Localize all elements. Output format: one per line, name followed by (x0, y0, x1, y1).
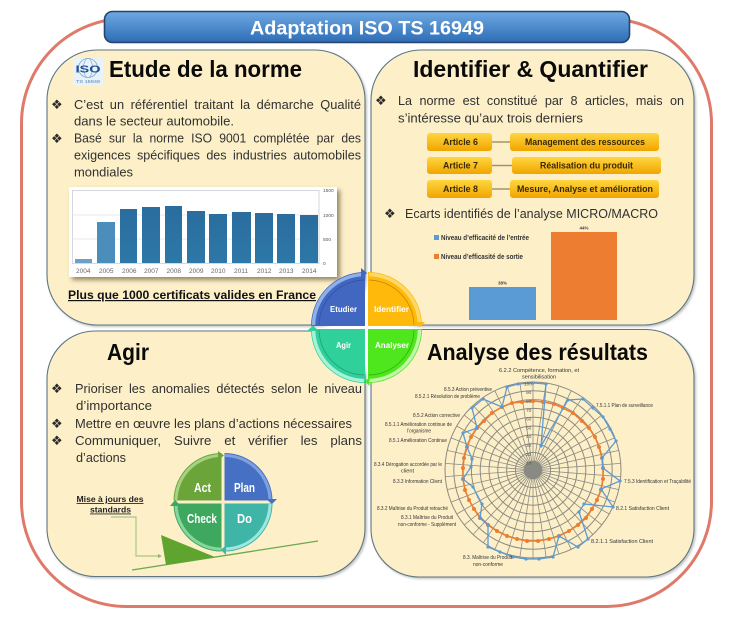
radar chart (374, 368, 691, 568)
text block: description de la norme (51, 97, 361, 180)
text block: description de la norme: exigences spécifiques des industries automobiles (74, 148, 361, 162)
callout: mise à jour des standards (76, 494, 162, 558)
axis labels: non-conforme (473, 562, 503, 568)
bar chart: certificats par année: 1500 (323, 188, 334, 194)
bar chart: certificats par année: 1000 (323, 213, 334, 219)
text block: actions: Mettre en œuvre les plans d’actions nécessaires (75, 416, 352, 431)
text block: écarts identifiés: ❖ (384, 207, 396, 222)
bar chart: efficacité entrée et sortie: Niveau d’efficasité de sortie (441, 254, 523, 261)
text block: description de la norme: ❖ (51, 98, 63, 113)
panel: Analyse des résultats (371, 330, 694, 577)
diagram: articles 6 7 8: Réalisation du produit (540, 160, 633, 170)
series: sortie (orange) (463, 401, 603, 541)
panel: Agir (47, 331, 365, 576)
bar chart: certificats par année: 2013 (279, 268, 294, 275)
axis labels: 8.3.3 Information Client (393, 479, 443, 485)
axis labels: 7.5.3 Identification et Traçabilité (624, 479, 691, 485)
callout: mise à jour des standards: Mise à jours des (76, 494, 144, 504)
scale labels: 90 (526, 390, 532, 396)
title banner (104, 12, 630, 42)
heading: Identifier et Quantifier: Identifier & Quantifier (413, 56, 648, 82)
text block: actions: ❖ (51, 434, 63, 449)
scale labels: 30 (526, 443, 532, 449)
heading: Etude de la norme: Etude de la norme (109, 56, 302, 82)
icon: ISO TS 16949 badge: ISO (76, 64, 100, 76)
axis labels: non-conforme - Supplément (398, 522, 456, 528)
axis labels: 7.5.1.1 Plan de surveillance (596, 403, 653, 409)
axis labels: 8.3.1 Maîtrise du Produit (401, 515, 454, 521)
diagram: articles 6 7 8: Article 7 (443, 160, 478, 170)
text block: articles de la norme (375, 93, 684, 126)
wedge and slope (132, 535, 318, 570)
icon: ISO TS 16949 badge (73, 57, 103, 86)
title banner: Adaptation ISO TS 16949 (250, 18, 484, 40)
icon: ISO TS 16949 badge: TS 16949 (76, 79, 101, 84)
text block: description de la norme: mondiales (74, 164, 133, 180)
central cycle wheel (307, 268, 425, 386)
panel: Identifier et Quantifier (371, 50, 694, 325)
axis labels (374, 368, 691, 568)
axis labels: 8.5.1.1 Amélioration continue de (385, 422, 452, 428)
bar chart: certificats par année: 2005 (99, 268, 114, 275)
diagram: articles 6 7 8: Mesure, Analyse et amélioration (517, 184, 653, 194)
scale labels: 50 (526, 426, 532, 432)
text block: actions: ❖ (51, 382, 63, 397)
axis labels: 8.5.3 Action préventive (444, 387, 492, 393)
bar chart: efficacité entrée et sortie: 44% (579, 226, 589, 230)
scale labels: 20 (526, 452, 532, 458)
axis labels: client (401, 468, 415, 474)
bar chart: certificats par année: 2006 (122, 268, 137, 275)
bar chart: certificats par année: 0 (323, 261, 326, 267)
segment: Check: Check (187, 512, 217, 526)
axis labels: 8.5.2 Action corrective (413, 413, 460, 419)
bar chart: certificats par année: 2008 (166, 268, 181, 275)
bar chart: certificats par année: 2009 (189, 268, 204, 275)
bar chart: efficacité entrée et sortie: 38% (498, 280, 507, 286)
segment: Act: Act (194, 481, 212, 495)
scale labels: 40 (526, 434, 532, 440)
text block: description de la norme: Basé sur la norme ISO 9001 complétée par des (74, 130, 361, 146)
text block: écarts identifiés: Ecarts identifiés de l’analyse MICRO/MACRO (405, 206, 658, 221)
text block: actions: Communiquer, Suivre et vérifier les plans (75, 433, 362, 448)
scale labels: 10 (526, 460, 532, 466)
text block: actions: Prioriser les anomalies détectés selon le niveau (75, 381, 362, 396)
callout: mise à jour des standards: standards (90, 504, 131, 514)
text block: articles de la norme: s’intéresse qu’aux trois derniers (398, 110, 583, 126)
text block: actions: ❖ (51, 417, 63, 432)
text block: actions (51, 381, 362, 465)
axis labels: 8.5.1 Amélioration Continue (389, 438, 447, 444)
scale labels: 100 (524, 382, 532, 388)
bar chart: certificats par année: 500 (323, 237, 331, 243)
scale labels: 60 (526, 416, 532, 422)
bar chart: certificats par année: 2004 (76, 268, 91, 275)
text block: articles de la norme: La norme est constitué par 8 articles, mais on (398, 93, 684, 108)
bar chart: efficacité entrée et sortie (434, 226, 617, 320)
diagram: articles 6 7 8 (427, 133, 661, 198)
axis labels: l’organisme (407, 428, 431, 434)
heading: Agir: Agir (107, 339, 149, 365)
diagram: articles 6 7 8: Article 8 (443, 184, 478, 194)
axis labels: 8.5.2.1 Résolution de problème (415, 394, 480, 400)
segment: Agir: Agir (336, 341, 351, 350)
heading: Analyse des résultats: Analyse des résultats (427, 339, 648, 365)
panel: Etude de la norme (47, 50, 365, 325)
diagram: cycle PDCA (170, 451, 277, 555)
diagram: articles 6 7 8: Management des ressources (525, 137, 645, 147)
bar chart: certificats par année: 2014 (302, 268, 317, 275)
segment: Plan: Plan (234, 481, 255, 495)
scale labels: 80 (526, 399, 532, 405)
segment: Do: Do (237, 512, 252, 526)
axis labels: sensibilisation (522, 374, 556, 380)
bar chart: certificats par année: 2011 (234, 268, 248, 275)
text block: description de la norme: ❖ (51, 132, 63, 147)
bar chart: certificats par année: 2007 (144, 268, 159, 275)
bar chart: certificats par année: 2010 (211, 268, 226, 275)
text block: description de la norme: C’est un référentiel traitant la démarche Qualité (74, 97, 361, 112)
text block: actions: d’importance (76, 398, 152, 413)
segment: Etudier: Etudier (330, 305, 357, 314)
segment: Identifier: Identifier (374, 305, 409, 314)
axis labels: 8.3.2 Maîtrise du Produit retouché (377, 506, 448, 512)
scale labels: 70 (526, 408, 532, 414)
axis labels: 8.2.1 Satisfaction Client (616, 506, 670, 512)
caption: certificats valides: Plus que 1000 certificats valides en France (68, 288, 316, 302)
bar chart: efficacité entrée et sortie: Niveau d’efficacité de l’entrée (441, 235, 529, 242)
scale labels (524, 382, 532, 466)
axis labels: 8.2.1.1 Satisfaction Client (591, 539, 654, 545)
text block: description de la norme: dans le secteur automobile. (74, 114, 234, 128)
axis labels: 8.3.4 Dérogation accordée par le (374, 462, 442, 468)
bar chart: certificats par année (69, 187, 337, 277)
text block: actions: d’actions (76, 450, 126, 465)
bar chart: certificats par année: 2012 (257, 268, 272, 275)
diagram: articles 6 7 8: Article 6 (443, 137, 478, 147)
series: entrée (bleu) (463, 383, 620, 559)
axis labels: 8.3. Maîtrise du Produit (463, 555, 513, 561)
axis labels: 6.2.2 Compétence, formation, et (499, 368, 580, 374)
segment: Analyser: Analyser (375, 341, 409, 350)
text block: articles de la norme: ❖ (375, 94, 387, 109)
